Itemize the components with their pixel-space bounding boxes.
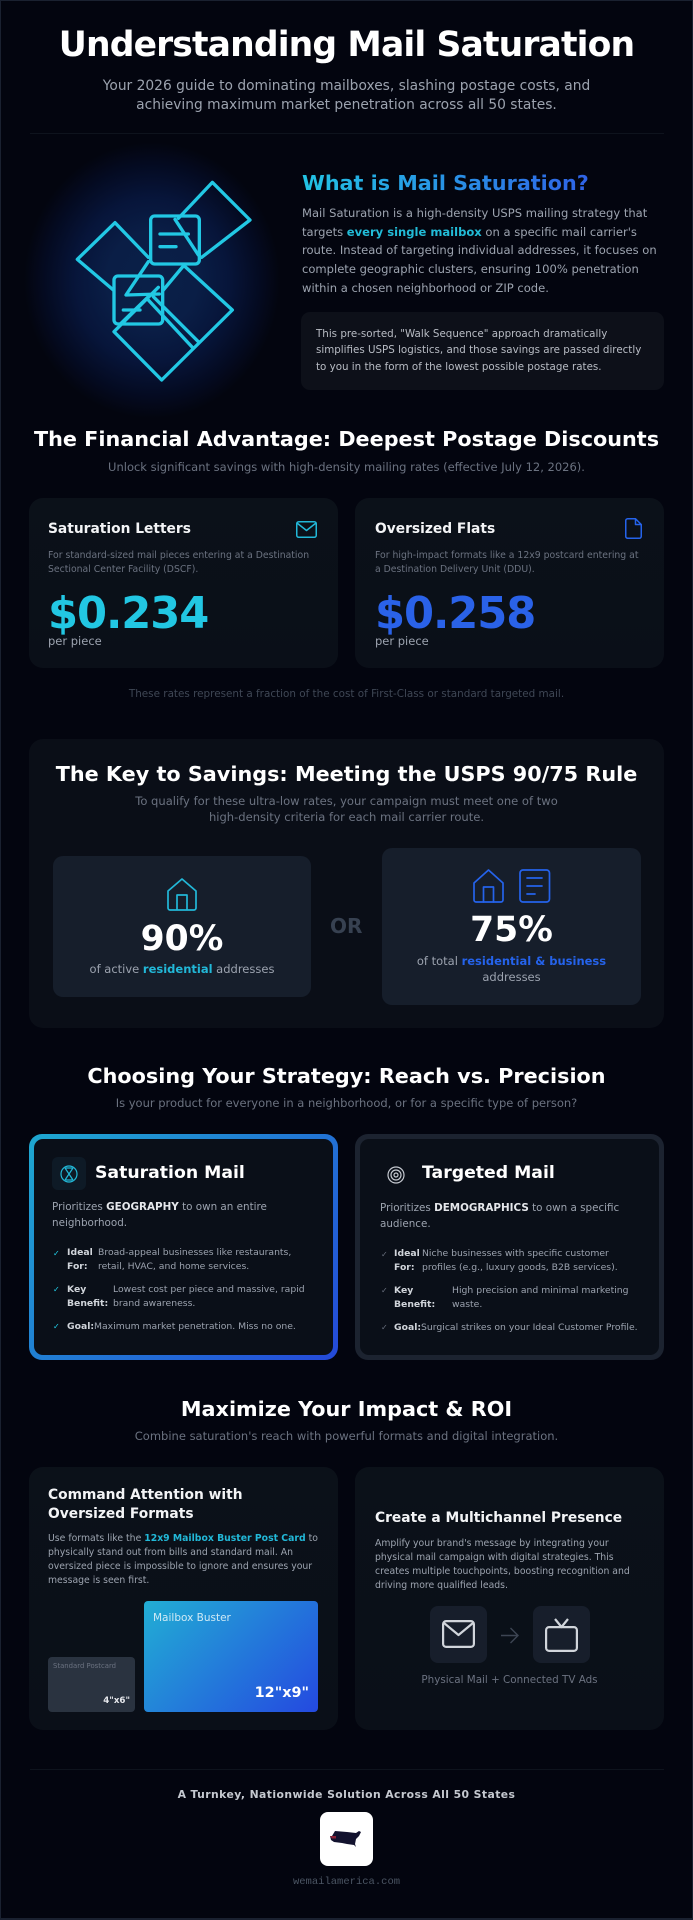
panel: oversized formats: message is seen first.	[48, 1575, 149, 1586]
panel: multichannel	[355, 1467, 664, 1730]
panel: targeted mail: Targeted Mail	[422, 1163, 555, 1183]
panel: oversized formats: oversized piece is impossible to ignore and ensures your	[48, 1561, 312, 1572]
website: wemailamerica.com	[293, 1876, 400, 1888]
stat: 90%	[53, 856, 311, 997]
stat: 75%: of total residential & business	[417, 954, 606, 968]
section heading: financial advantage: The Financial Advantage: Deepest Postage Discounts	[34, 427, 659, 451]
standard postcard: 4"x6"	[103, 1696, 130, 1706]
panel: oversized flats: per piece	[375, 634, 429, 648]
list: features: retail, HVAC, and home services.	[98, 1261, 249, 1272]
illustration: mail pieces with glow	[10, 140, 300, 420]
icon: house and building	[473, 869, 550, 903]
callout: to you in the form of the lowest possible postage rates.	[316, 361, 602, 373]
stat: 75%: 75%	[470, 910, 553, 950]
list: features: High precision and minimal marketing	[452, 1285, 629, 1296]
panel: oversized formats: Use formats like the 12x9 Mailbox Buster Post Card to	[48, 1533, 318, 1544]
stat: 90%: of active residential addresses	[90, 962, 274, 976]
panel: multichannel: creates multiple touchpoints, boosting recognition and	[375, 1566, 630, 1577]
subtitle: Your 2026 guide to dominating mailboxes, slashing postage costs, and	[103, 78, 590, 94]
icon: map	[52, 1157, 86, 1190]
footer	[30, 1769, 664, 1888]
panel: multichannel: Physical Mail + Connected TV Ads	[421, 1674, 598, 1686]
callout: simplifies USPS logistics, and those savings are passed directly	[316, 344, 641, 356]
callout: This pre-sorted, "Walk Sequence" approach dramatically	[316, 328, 607, 340]
list: features: ✓	[381, 1323, 388, 1332]
stat: 75%	[382, 848, 641, 1005]
panel: saturation letters: Saturation Letters	[48, 521, 191, 537]
icon: house	[167, 878, 197, 911]
panel: oversized formats	[29, 1467, 338, 1730]
icon: mail box	[430, 1606, 487, 1663]
list: features: Ideal	[394, 1248, 420, 1259]
section heading: financial advantage: Unlock significant savings with high-density mailing rates (effective July 12, 2026).	[108, 460, 585, 474]
standard postcard	[48, 1657, 135, 1712]
list: features: Key	[67, 1284, 86, 1295]
callout	[301, 312, 664, 390]
panel: 90/75 rule: To qualify for these ultra-low rates, your campaign must meet one of two	[135, 794, 558, 808]
icon: envelope	[296, 521, 317, 538]
mailbox buster card	[144, 1601, 318, 1712]
mailbox buster card: Mailbox Buster	[153, 1612, 231, 1624]
panel: targeted mail: Prioritizes DEMOGRAPHICS to own a specific	[380, 1202, 619, 1214]
heading: What is Mail Saturation?	[302, 171, 589, 195]
list: features: Goal:	[67, 1321, 94, 1332]
panel: oversized formats: physically stand out from bills and standard mail. An	[48, 1547, 293, 1558]
title: Understanding Mail Saturation	[59, 25, 634, 65]
price: $0.234	[48, 589, 208, 639]
footnote: These rates represent a fraction of the cost of First-Class or standard targeted mail.	[129, 688, 564, 700]
section heading: ROI: Maximize Your Impact & ROI	[181, 1397, 512, 1421]
section heading: strategy	[87, 1064, 606, 1110]
panel: 90/75 rule	[29, 739, 664, 1028]
footer: A Turnkey, Nationwide Solution Across All 50 States	[178, 1788, 515, 1801]
icon: target	[387, 1166, 405, 1184]
section heading: strategy: Is your product for everyone in a neighborhood, or for a specific type of person?	[116, 1096, 577, 1110]
panel: multichannel: Create a Multichannel Presence	[375, 1510, 622, 1526]
body text: targets every single mailbox on a specific mail carrier's	[302, 225, 637, 239]
panel: saturation letters: per piece	[48, 634, 102, 648]
panel: saturation mail: Saturation Mail	[95, 1163, 245, 1183]
list: features	[381, 1248, 638, 1333]
list: features: Key	[394, 1285, 413, 1296]
panel: saturation mail: neighborhood.	[52, 1217, 127, 1229]
list: features: Maximum market penetration. Miss no one.	[94, 1321, 296, 1332]
list: features: Benefit:	[67, 1298, 108, 1309]
panel: oversized flats: Oversized Flats	[375, 521, 495, 537]
list: features	[53, 1247, 305, 1332]
list: features: Niche businesses with specific customer	[422, 1248, 609, 1259]
stat: 75%: addresses	[482, 970, 541, 984]
panel: oversized flats	[355, 498, 664, 668]
body text: route. Instead of targeting individual addresses, it focuses on	[302, 243, 657, 257]
panel: multichannel: physical mail campaign with digital strategies. This	[375, 1552, 614, 1563]
panel: saturation letters: Sectional Center Facility (DSCF).	[48, 564, 198, 575]
panel: oversized flats: a Destination Delivery Unit (DDU).	[375, 564, 535, 575]
panel: saturation letters: For standard-sized mail pieces entering at a Destination	[48, 550, 309, 561]
panel: oversized formats: Oversized Formats	[48, 1506, 194, 1522]
panel: multichannel: driving more qualified leads.	[375, 1580, 508, 1591]
body text	[302, 206, 657, 295]
section heading: financial advantage	[34, 427, 659, 474]
icon: file	[625, 518, 642, 539]
panel: what is mail saturation	[301, 171, 664, 390]
panel: saturation mail	[29, 1134, 338, 1360]
list: features: waste.	[452, 1299, 482, 1310]
list: features: ✓	[53, 1322, 60, 1331]
mailbox buster card: 12"x9"	[255, 1685, 309, 1701]
header	[59, 25, 634, 113]
panel: saturation letters	[29, 498, 338, 668]
list: features: ✓	[381, 1286, 388, 1295]
body text: Mail Saturation is a high-density USPS mailing strategy that	[302, 206, 647, 220]
panel: oversized formats: Command Attention with	[48, 1487, 243, 1503]
list: features: ✓	[53, 1249, 60, 1258]
list: features: Goal:	[394, 1322, 421, 1333]
arrow	[501, 1628, 519, 1644]
body text: within a chosen neighborhood or ZIP code.	[302, 281, 549, 295]
panel: targeted mail	[355, 1134, 664, 1360]
price: $0.258	[375, 589, 535, 639]
list: features: Broad-appeal businesses like restaurants,	[98, 1247, 291, 1258]
panel: 90/75 rule: high-density criteria for each mail carrier route.	[209, 810, 484, 824]
list: features: For:	[394, 1262, 415, 1273]
panel: oversized flats: For high-impact formats like a 12x9 postcard entering at	[375, 550, 638, 561]
subtitle: achieving maximum market penetration across all 50 states.	[136, 97, 557, 113]
panel: saturation mail: Prioritizes GEOGRAPHY to own an entire	[52, 1201, 267, 1213]
panel: targeted mail: audience.	[380, 1218, 431, 1230]
body text: complete geographic clusters, ensuring 100% penetration	[302, 262, 639, 276]
panel: multichannel: Amplify your brand's message by integrating your	[375, 1538, 609, 1549]
list: features: ✓	[53, 1285, 60, 1294]
list: features: For:	[67, 1261, 88, 1272]
section heading: ROI	[135, 1397, 558, 1443]
list: features: Ideal	[67, 1247, 93, 1258]
panel: 90/75 rule: The Key to Savings: Meeting the USPS 90/75 Rule	[56, 762, 637, 786]
icon: tv box	[533, 1606, 590, 1663]
list: features: Lowest cost per piece and massive, rapid	[113, 1284, 305, 1295]
list: features: brand awareness.	[113, 1298, 195, 1309]
section heading: ROI: Combine saturation's reach with powerful formats and digital integration.	[135, 1429, 558, 1443]
list: features: profiles (e.g., luxury goods, B2B services).	[422, 1262, 618, 1273]
stat: 90%: 90%	[141, 919, 223, 959]
list: features: Surgical strikes on your Ideal Customer Profile.	[421, 1322, 638, 1333]
logo	[320, 1812, 373, 1866]
list: features: ✓	[381, 1250, 388, 1259]
or: OR	[330, 914, 362, 938]
list: features: Benefit:	[394, 1299, 435, 1310]
section heading: strategy: Choosing Your Strategy: Reach vs. Precision	[87, 1064, 606, 1088]
standard postcard: Standard Postcard	[53, 1662, 116, 1670]
subtitle	[102, 78, 590, 113]
